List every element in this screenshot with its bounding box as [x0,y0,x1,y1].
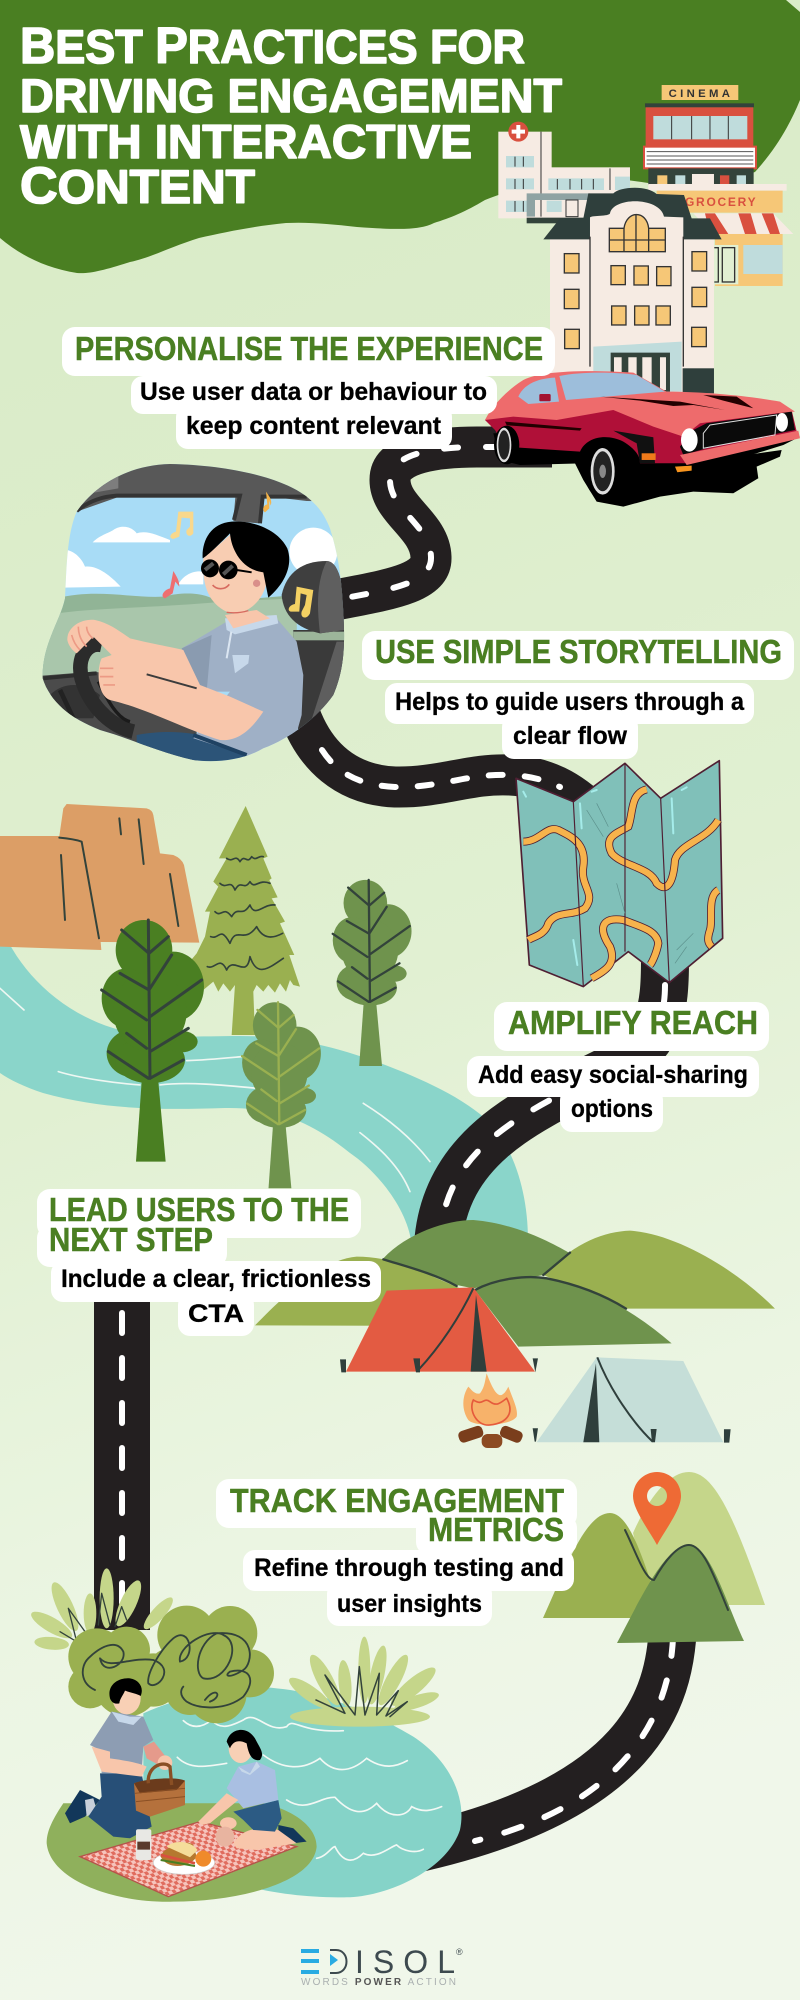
callout: lead users to the next step: NEXT STEP [49,1221,213,1258]
logo [301,1944,463,1988]
callout: amplify reach: AMPLIFY REACH [508,1004,758,1041]
callout: personalise the experience: PERSONALISE THE EXPERIENCE [75,330,543,367]
callout: amplify reach: Add easy social-sharing [478,1061,748,1089]
red tent [340,1287,538,1372]
man with basket [65,1678,185,1838]
callout: track engagement metrics: TRACK ENGAGEMENT [230,1482,564,1519]
grass tuft: right [285,1637,441,1727]
lake and picnic scene [28,1568,461,1902]
road: vertical to picnic [94,1290,150,1630]
callout: use simple storytelling: clear flow [513,722,628,750]
callout: lead users to the next step [37,1189,381,1336]
grocery: GROCERY [685,195,756,209]
road: mountains to lake [410,1625,673,1850]
callout: track engagement metrics: METRICS [428,1511,564,1548]
logo: ISOL [355,1944,455,1980]
callout: personalise the experience: keep content relevant [186,412,442,440]
picnic blanket [80,1822,297,1897]
tree: mid green [333,880,412,1066]
callout: amplify reach: options [571,1095,653,1123]
camp: hills and tents [255,1220,775,1448]
cinema: CINEMA [669,88,730,100]
icon: buildings [498,85,793,395]
icon: campfire [457,1373,524,1448]
callout: track engagement metrics: Refine through testing and [254,1554,564,1582]
tree: olive veined [242,1002,321,1188]
callout: lead users to the next step: LEAD USERS TO THE [49,1191,349,1228]
woman [198,1730,307,1850]
title: WITH INTERACTIVE [20,115,472,168]
callout: amplify reach [467,1002,769,1132]
logo: WORDS POWER ACTION [301,1977,456,1988]
scene: rocks, pine and river [0,804,528,1240]
title: DRIVING ENGAGEMENT [20,69,562,122]
callout: use simple storytelling: Helps to guide users through a [395,688,745,716]
road: driver to map [300,715,595,815]
grass tuft: left [28,1568,177,1651]
cinema [644,85,756,185]
header blob [0,0,800,273]
blue tent [533,1357,731,1443]
hospital [498,122,630,223]
callout: lead users to the next step: Include a clear, frictionless [61,1265,371,1293]
callout: use simple storytelling [362,631,794,759]
callout: lead users to the next step: CTA [188,1300,244,1328]
bushes [68,1606,274,1723]
hotel [543,188,722,395]
lake [143,1687,461,1897]
tree: dark green [102,920,204,1162]
track mountains and pin [543,1472,765,1643]
callout: track engagement metrics [216,1479,577,1626]
title [20,17,562,214]
icon: folded map [516,761,723,987]
icon: map pin [633,1472,681,1545]
hills [255,1220,775,1347]
callout: personalise the experience [62,327,555,449]
road: map to camp [438,960,665,1245]
callout: personalise the experience: Use user data or behaviour to [140,378,487,406]
driver illustration [42,464,344,762]
drink and food [136,1829,215,1874]
title: BEST PRACTICES FOR [20,17,525,74]
callout: track engagement metrics: user insights [337,1590,482,1618]
grocery [648,184,793,286]
title: CONTENT [20,157,255,214]
logo: ® [456,1947,463,1957]
picnic ground [47,1803,317,1902]
road: personalise to driver [325,447,552,602]
icon: red car [485,371,800,507]
trees [102,880,412,1188]
